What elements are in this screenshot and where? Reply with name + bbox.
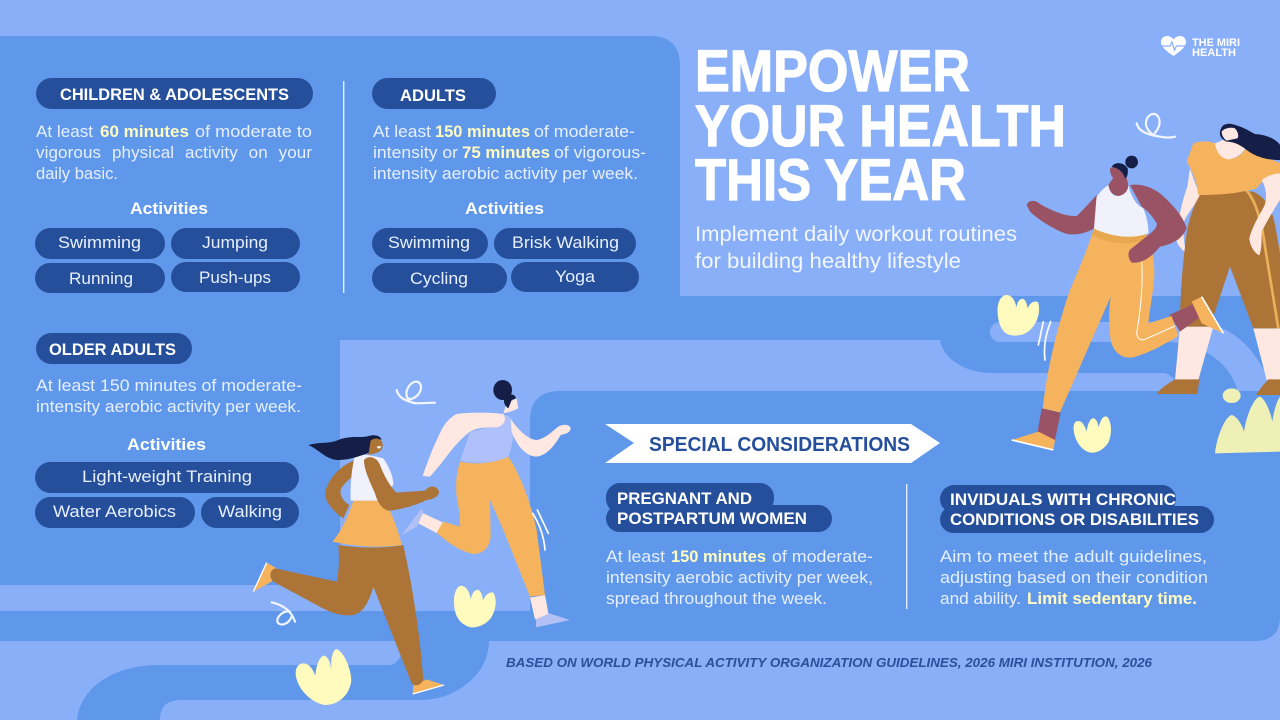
text block: chronic conditions guideline: Aim to meet the adult guidelines, [940,547,1207,566]
text block: children guideline: At least [36,122,93,141]
text block: chronic conditions guideline: adjusting based on their condition [940,568,1208,587]
panel: individuals with chronic conditions [940,485,1214,608]
heading pills: CONDITIONS OR DISABILITIES [950,510,1199,529]
text block: adults guideline: 75 minutes [462,143,550,162]
activity pills [35,462,299,528]
logo: the miri health [1161,36,1240,59]
activity pills: Yoga [555,267,596,286]
activity pills: Brisk Walking [512,233,619,252]
activity pills: Jumping [202,233,268,252]
motion lines [1038,322,1051,360]
text block: adults guideline: 150 minutes [435,122,530,141]
panel: older adults [35,333,302,528]
activities label: Activities [130,199,208,218]
logo: the miri health: HEALTH [1192,47,1236,59]
subtitle: Implement daily workout routines [695,223,1017,246]
motion lines [533,510,548,550]
activity pills: Cycling [410,269,468,288]
activity pills: Push-ups [199,268,271,287]
activity pills: Walking [218,502,282,521]
text block: pregnant guideline: 150 minutes [671,547,766,566]
activity pills: Swimming [58,233,141,252]
icon: squiggle [272,602,295,624]
back runner [402,380,571,627]
divider [906,484,907,609]
heading pills: POSTPARTUM WOMEN [617,509,807,528]
panel: pregnant and postpartum women [606,483,873,608]
heading pills: INVIDUALS WITH CHRONIC [950,490,1176,509]
activity pills: Water Aerobics [53,502,176,521]
text block: pregnant guideline: intensity aerobic activity per week, [606,568,873,587]
illustration: runners top right [998,114,1280,453]
footer source: BASED ON WORLD PHYSICAL ACTIVITY ORGANIZATION GUIDELINES, 2026 MIRI INSTITUTION, 2026 [506,656,1153,670]
icon: flower [454,586,496,627]
back woman [1157,124,1280,395]
icon: bush [1215,388,1280,453]
text block: adults guideline: of moderate- [534,122,635,141]
text block: adults guideline: At least [373,122,431,141]
heading pill: older adults: OLDER ADULTS [49,340,176,359]
text block: children guideline: of moderate to [195,122,312,141]
divider [343,81,344,293]
text block: chronic conditions guideline: Limit sedentary time. [1027,589,1197,608]
logo: the miri health: THE MIRI [1192,37,1240,49]
text block: pregnant guideline [606,547,873,608]
front woman [1012,156,1223,450]
subtitle [695,223,1017,273]
text block: children guideline [36,122,312,183]
text block: adults guideline: intensity aerobic activity per week. [373,164,638,183]
text block: older adults guideline [36,376,302,416]
text block: older adults guideline: At least 150 minutes of moderate- [36,376,302,395]
text block: children guideline: vigorous physical activity on your [36,143,312,162]
panel: children and adolescents [35,78,313,293]
icon: squiggle [1137,114,1175,138]
heading pill: adults [372,78,496,109]
activity pills: Swimming [388,233,470,252]
text block: adults guideline: intensity or [373,143,458,162]
heading pill: older adults [36,333,192,364]
heading pills: PREGNANT AND [617,489,752,508]
icon: squiggle [397,382,435,403]
text block: children guideline: 60 minutes [100,122,189,141]
title [695,39,1066,213]
text block: pregnant guideline: At least [606,547,665,566]
activity pills: Light-weight Training [82,467,252,486]
text block: children guideline: daily basic. [36,164,118,183]
heading pills [606,483,832,532]
text block: adults guideline: of vigorous- [554,143,646,162]
title: YOUR HEALTH [695,94,1066,159]
activity pills [372,228,639,293]
activities label: Activities [127,435,206,454]
activity pills [35,228,300,293]
special considerations ribbon [605,424,940,463]
title: THIS YEAR [695,148,966,213]
title: EMPOWER [695,39,970,104]
icon: flower [1074,416,1111,453]
front runner [253,435,444,694]
heading pill: children and adolescents: CHILDREN & ADOLESCENTS [60,85,289,104]
subtitle: for building healthy lifestyle [695,250,961,273]
special considerations ribbon: SPECIAL CONSIDERATIONS [649,434,910,456]
activities label: Activities [465,199,544,218]
illustration: runners bottom left [253,380,571,705]
heading pills [940,485,1214,533]
heading pill: adults: ADULTS [400,86,466,105]
activity pills: Running [69,269,133,288]
text block: adults guideline [373,122,646,183]
text block: older adults guideline: intensity aerobic activity per week. [36,397,301,416]
text block: chronic conditions guideline [940,547,1208,608]
text block: pregnant guideline: spread throughout the week. [606,589,827,608]
panel: adults [372,78,646,293]
icon: flower [296,649,351,705]
text block: chronic conditions guideline: and ability. [940,589,1021,608]
text block: pregnant guideline: of moderate- [772,547,873,566]
heading pill: children and adolescents [36,78,313,109]
icon: flower [998,295,1039,336]
